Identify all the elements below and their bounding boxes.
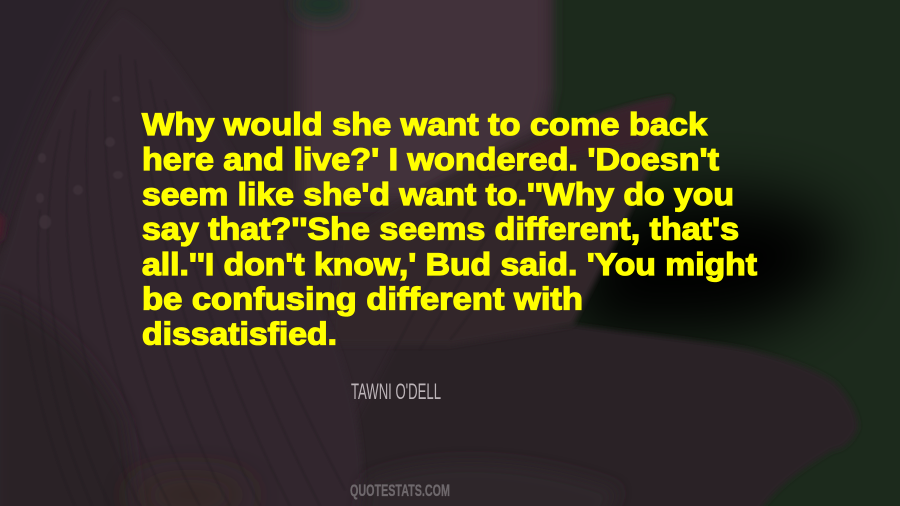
background: lower left petal xyxy=(0,290,140,506)
author name: TAWNI O'DELL xyxy=(351,379,441,404)
quote text: be confusing different with xyxy=(142,280,583,316)
quote text: dissatisfied. xyxy=(142,316,337,352)
background: red tip on left edge xyxy=(0,210,5,242)
watermark: QUOTESTATS.COM xyxy=(350,482,450,500)
quote text xyxy=(142,106,758,352)
background: grey-mauve area at bottom xyxy=(360,462,620,506)
background: large left petal with ribs xyxy=(0,12,363,506)
quote text: here and live?' I wondered. 'Doesn't xyxy=(142,141,720,177)
quote text: seem like she'd want to.''Why do you xyxy=(142,176,734,212)
background: petal ribs xyxy=(20,55,560,506)
background: yellow glow at bottom xyxy=(130,481,250,506)
background: green foliage on the right xyxy=(552,0,900,506)
background: pointed centre petal xyxy=(330,97,672,345)
background: dark shadow behind right text xyxy=(560,193,843,335)
background: water droplets xyxy=(36,96,123,229)
background: lower right petal xyxy=(300,325,858,506)
background: green gap at top xyxy=(294,0,350,20)
background: upper left darker corner xyxy=(0,0,110,240)
quote text: all.''I don't know,' Bud said. 'You might xyxy=(142,246,758,282)
quote text: Why would she want to come back xyxy=(142,106,708,142)
quote text: say that?''She seems different, that's xyxy=(142,210,739,246)
background: pale blurred petal top centre xyxy=(300,0,550,200)
